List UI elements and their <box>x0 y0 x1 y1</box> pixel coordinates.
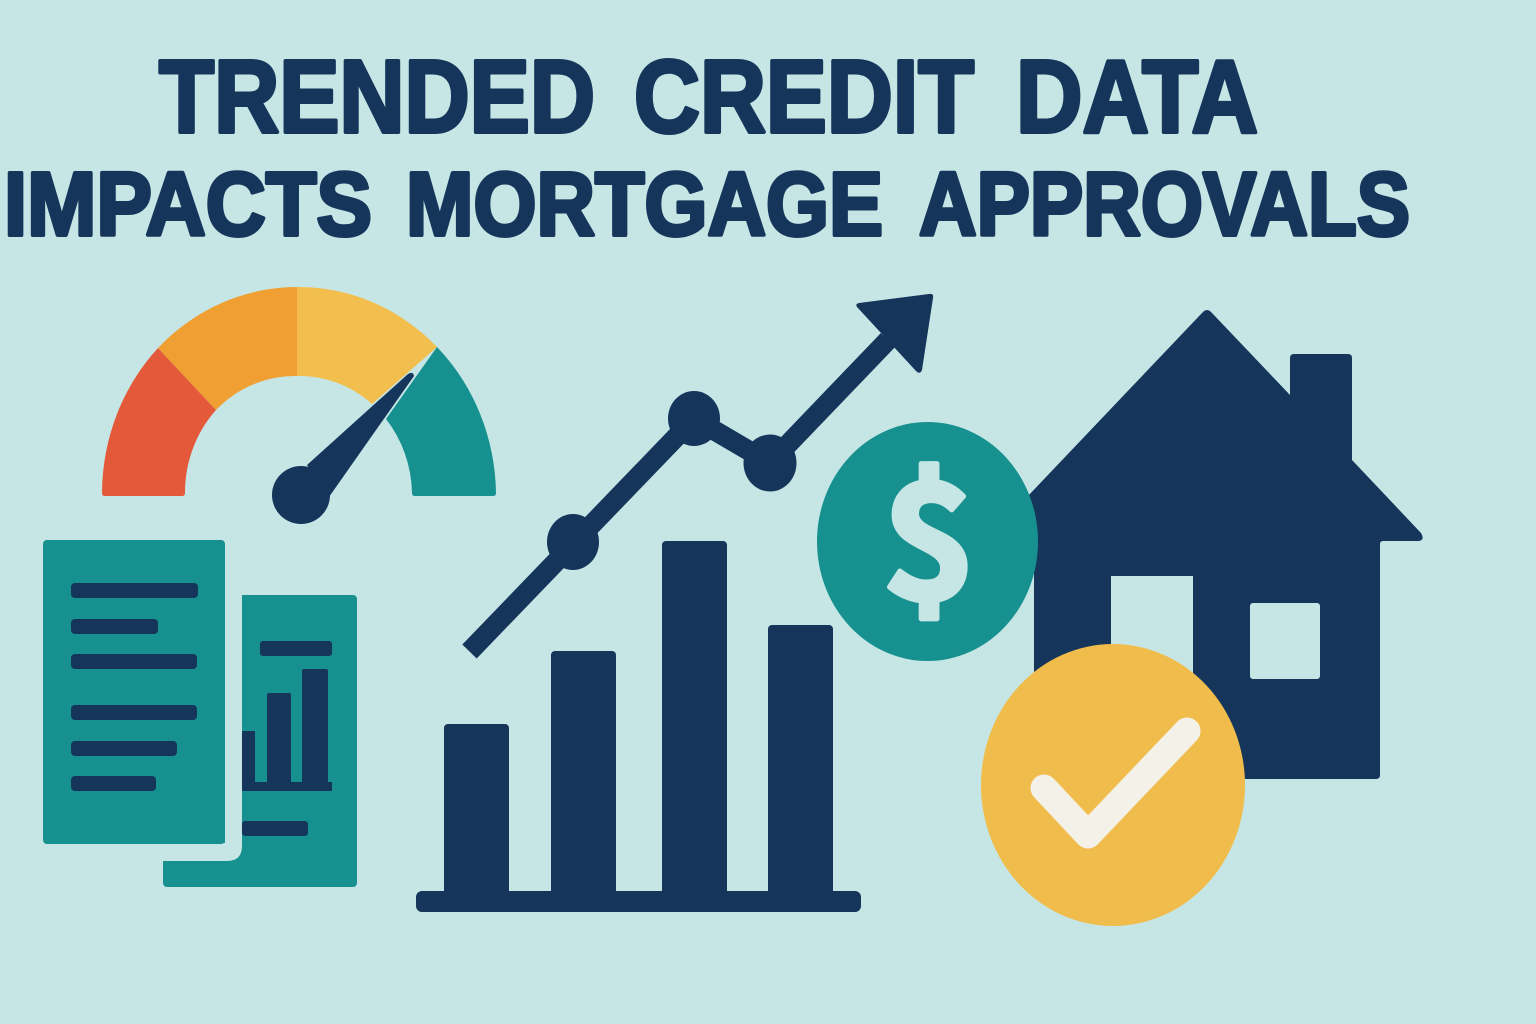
title line 2: IMPACTS <box>4 155 372 255</box>
gauge needle <box>272 373 414 524</box>
dollar sign: $ <box>882 414 976 646</box>
title line 2: MORTGAGE <box>406 155 883 255</box>
title line 1: CREDIT <box>634 39 974 154</box>
icon: credit score gauge <box>102 287 496 524</box>
title line 1 <box>159 39 1258 154</box>
trend arrow <box>470 294 933 652</box>
title line 2: APPROVALS <box>919 155 1410 255</box>
icon: house <box>1027 310 1423 779</box>
icon: approval check <box>981 644 1245 926</box>
icon: credit report documents <box>43 540 357 887</box>
title <box>4 39 1410 255</box>
house door <box>1111 576 1193 696</box>
bar chart <box>416 541 861 912</box>
back document chart <box>242 641 332 836</box>
title line 2 <box>4 155 1410 255</box>
title line 1: TRENDED <box>159 39 595 154</box>
house window <box>1250 603 1320 679</box>
front document lines <box>71 583 198 791</box>
icon: dollar coin <box>817 414 1038 661</box>
title line 1: DATA <box>1016 39 1258 154</box>
